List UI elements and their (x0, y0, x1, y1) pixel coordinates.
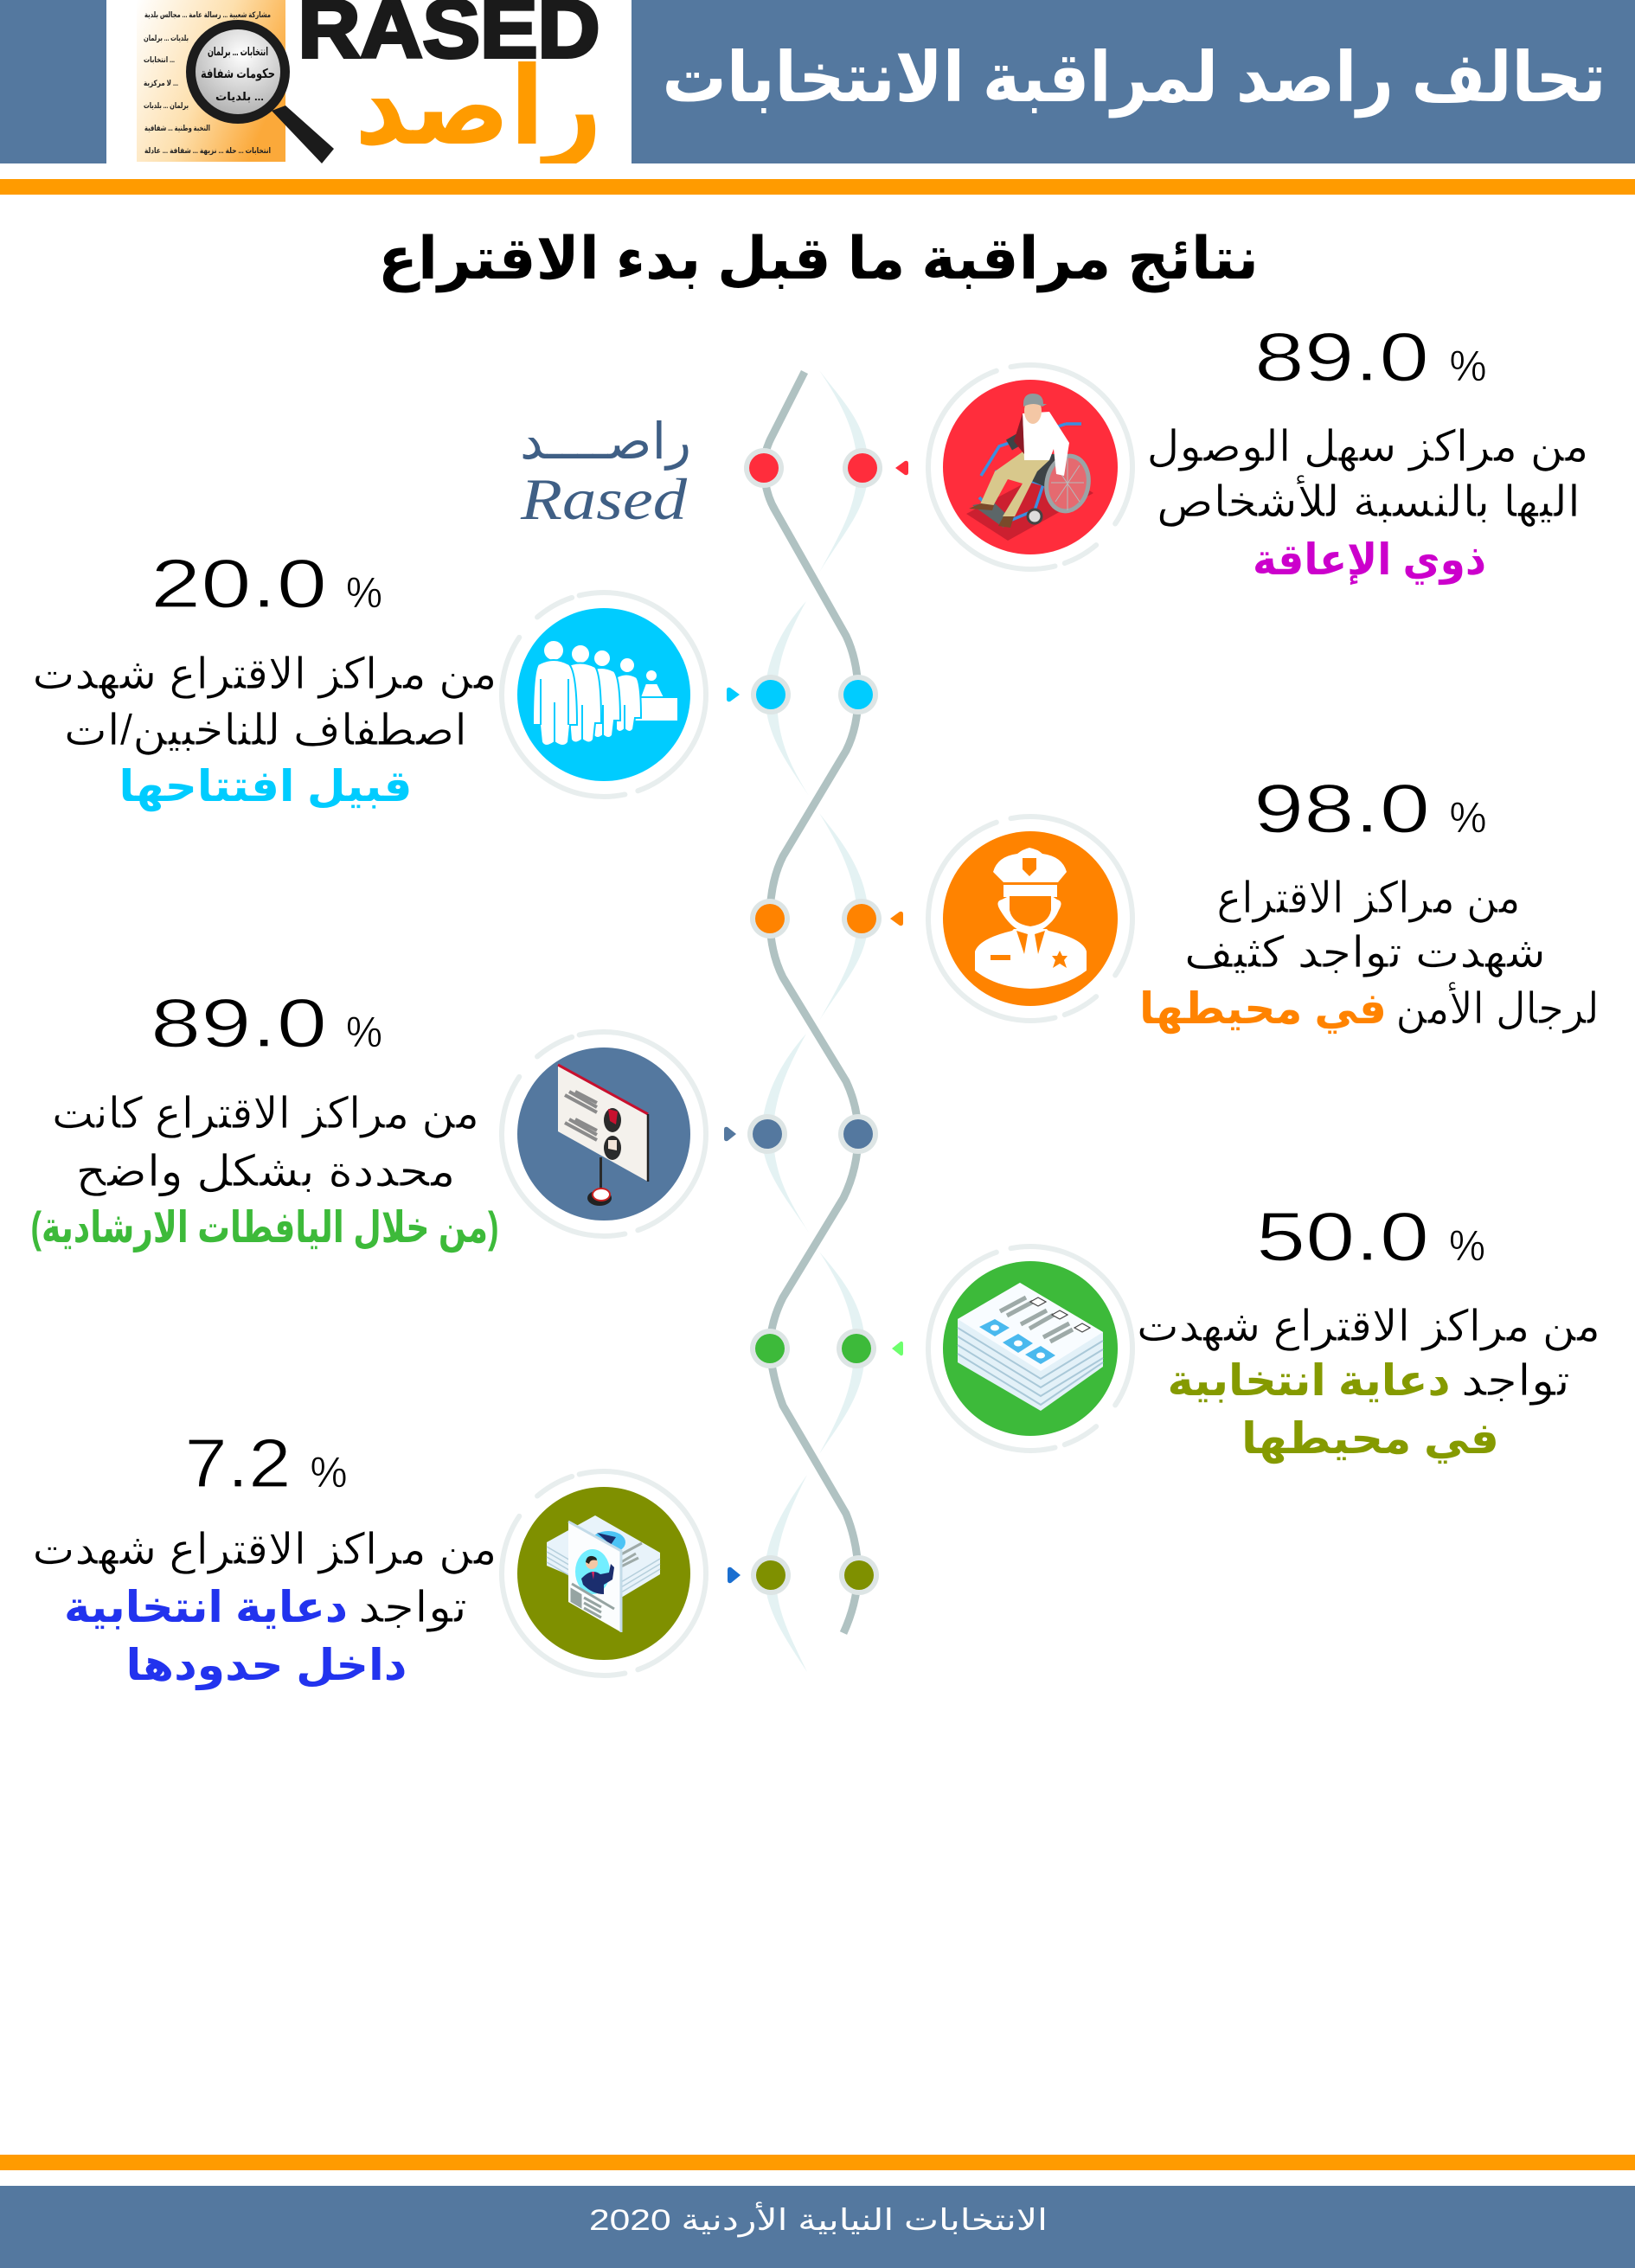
timeline strands (761, 370, 869, 1672)
item 5: campaigning nearby (750, 1198, 1600, 1468)
item 2: queues (33, 545, 878, 818)
statistic (151, 984, 382, 1061)
statistic (151, 545, 382, 622)
statistic: % (1450, 342, 1486, 390)
item 1: wheelchair access (744, 318, 1588, 586)
magnifier: ... بلديات (215, 90, 264, 103)
statistic (1254, 318, 1486, 395)
description: دعاية انتخابية (64, 1583, 348, 1631)
statistic: % (346, 1008, 382, 1056)
description: في محيطها (1139, 984, 1387, 1035)
description: من مراكز الاقتراع شهدت (33, 650, 497, 700)
description: تواجد (1461, 1356, 1570, 1406)
node dots (751, 675, 878, 714)
Rased watermark: Rased (520, 466, 688, 532)
description: اصطفاف للناخبين/ات (64, 706, 467, 755)
statistic: 20.0 (151, 545, 327, 622)
description: من مراكز الاقتراع شهدت (1137, 1302, 1600, 1352)
logo: برلمان ... بلديات (144, 101, 189, 111)
description: تواجد (358, 1583, 467, 1632)
node dots (750, 899, 882, 939)
statistic: % (1450, 793, 1486, 842)
description: لرجال الأمن (1396, 982, 1599, 1034)
logo: ... لا مركزية (144, 79, 178, 88)
connector arrow (895, 461, 908, 475)
statistic: 98.0 (1254, 770, 1430, 847)
statistic: 7.2 (185, 1425, 291, 1502)
item 6: campaigning inside (33, 1425, 879, 1697)
logo: بلديات ... برلمان (144, 34, 189, 43)
icon: candidate posters (480, 1450, 728, 1697)
statistic: 50.0 (1256, 1198, 1429, 1275)
logo: ... انتخابات (144, 55, 175, 64)
icon: ballot stack (911, 1229, 1150, 1468)
connector arrow (890, 912, 903, 926)
Rased watermark (520, 413, 691, 532)
description: (من خلال اليافطات الارشادية) (31, 1203, 498, 1253)
statistic: 89.0 (1254, 318, 1429, 395)
node dots (751, 1555, 879, 1595)
statistic: % (310, 1448, 348, 1496)
description (31, 1089, 498, 1253)
description (1139, 874, 1599, 1035)
description: من مراكز سهل الوصول (1147, 422, 1588, 472)
description: ذوي الإعاقة (1253, 535, 1486, 586)
node dots (747, 1114, 878, 1154)
statistic (185, 1425, 348, 1502)
icon: queue of voters (480, 571, 728, 818)
description: قبيل افتتاحها (119, 762, 412, 812)
connector arrow (727, 688, 740, 702)
description: داخل حدودها (126, 1641, 407, 1691)
node dots (744, 448, 882, 488)
logo: راصد (355, 47, 602, 170)
logo (106, 0, 632, 170)
icon: wheelchair (911, 348, 1150, 586)
Rased watermark: راصــــد (520, 413, 691, 471)
logo: انتخابات ... حلة ... نزيهة ... شفافة ... عادلة (144, 146, 271, 156)
description (1137, 1302, 1600, 1464)
description: في محيطها (1241, 1414, 1499, 1464)
description: من مراكز الاقتراع شهدت (33, 1525, 497, 1575)
connector arrow (728, 1567, 741, 1583)
statistic: % (346, 568, 382, 617)
description: شهدت تواجد كثيف (1184, 928, 1546, 978)
description: دعاية انتخابية (1168, 1356, 1450, 1405)
description (33, 650, 497, 812)
description: محددة بشكل واضح (76, 1147, 455, 1197)
description: من مراكز الاقتراع (1216, 874, 1521, 923)
description (1147, 422, 1588, 586)
node dots (750, 1329, 876, 1368)
footer band (0, 2155, 1635, 2268)
description (33, 1525, 497, 1691)
statistic: % (1449, 1221, 1485, 1270)
logo: النخبة وطنية ... شفافية (144, 124, 210, 133)
statistic (1256, 1198, 1485, 1275)
icon: police officer (911, 799, 1150, 1038)
statistic (1254, 770, 1486, 847)
subtitle heading: نتائج مراقبة ما قبل بدء الاقتراع (378, 226, 1259, 293)
magnifier: حكومات شفافة (201, 67, 275, 81)
item 3: security (750, 770, 1599, 1038)
connector arrow (892, 1342, 903, 1355)
description: اليها بالنسبة للأشخاص (1157, 475, 1580, 528)
icon: information banner (480, 1010, 728, 1258)
header band (0, 0, 1635, 195)
description: من مراكز الاقتراع كانت (52, 1089, 479, 1138)
item 4: banners (31, 984, 878, 1258)
magnifier (186, 20, 334, 163)
connector arrow (724, 1127, 736, 1141)
statistic: 89.0 (151, 984, 327, 1061)
logo: مشاركة شعبية ... رسالة عامة ... مجالس بلدية (144, 10, 271, 20)
magnifier: انتخابات ... برلمان (208, 45, 268, 58)
footer text: الانتخابات النيابية الأردنية 2020 (589, 2201, 1048, 2237)
